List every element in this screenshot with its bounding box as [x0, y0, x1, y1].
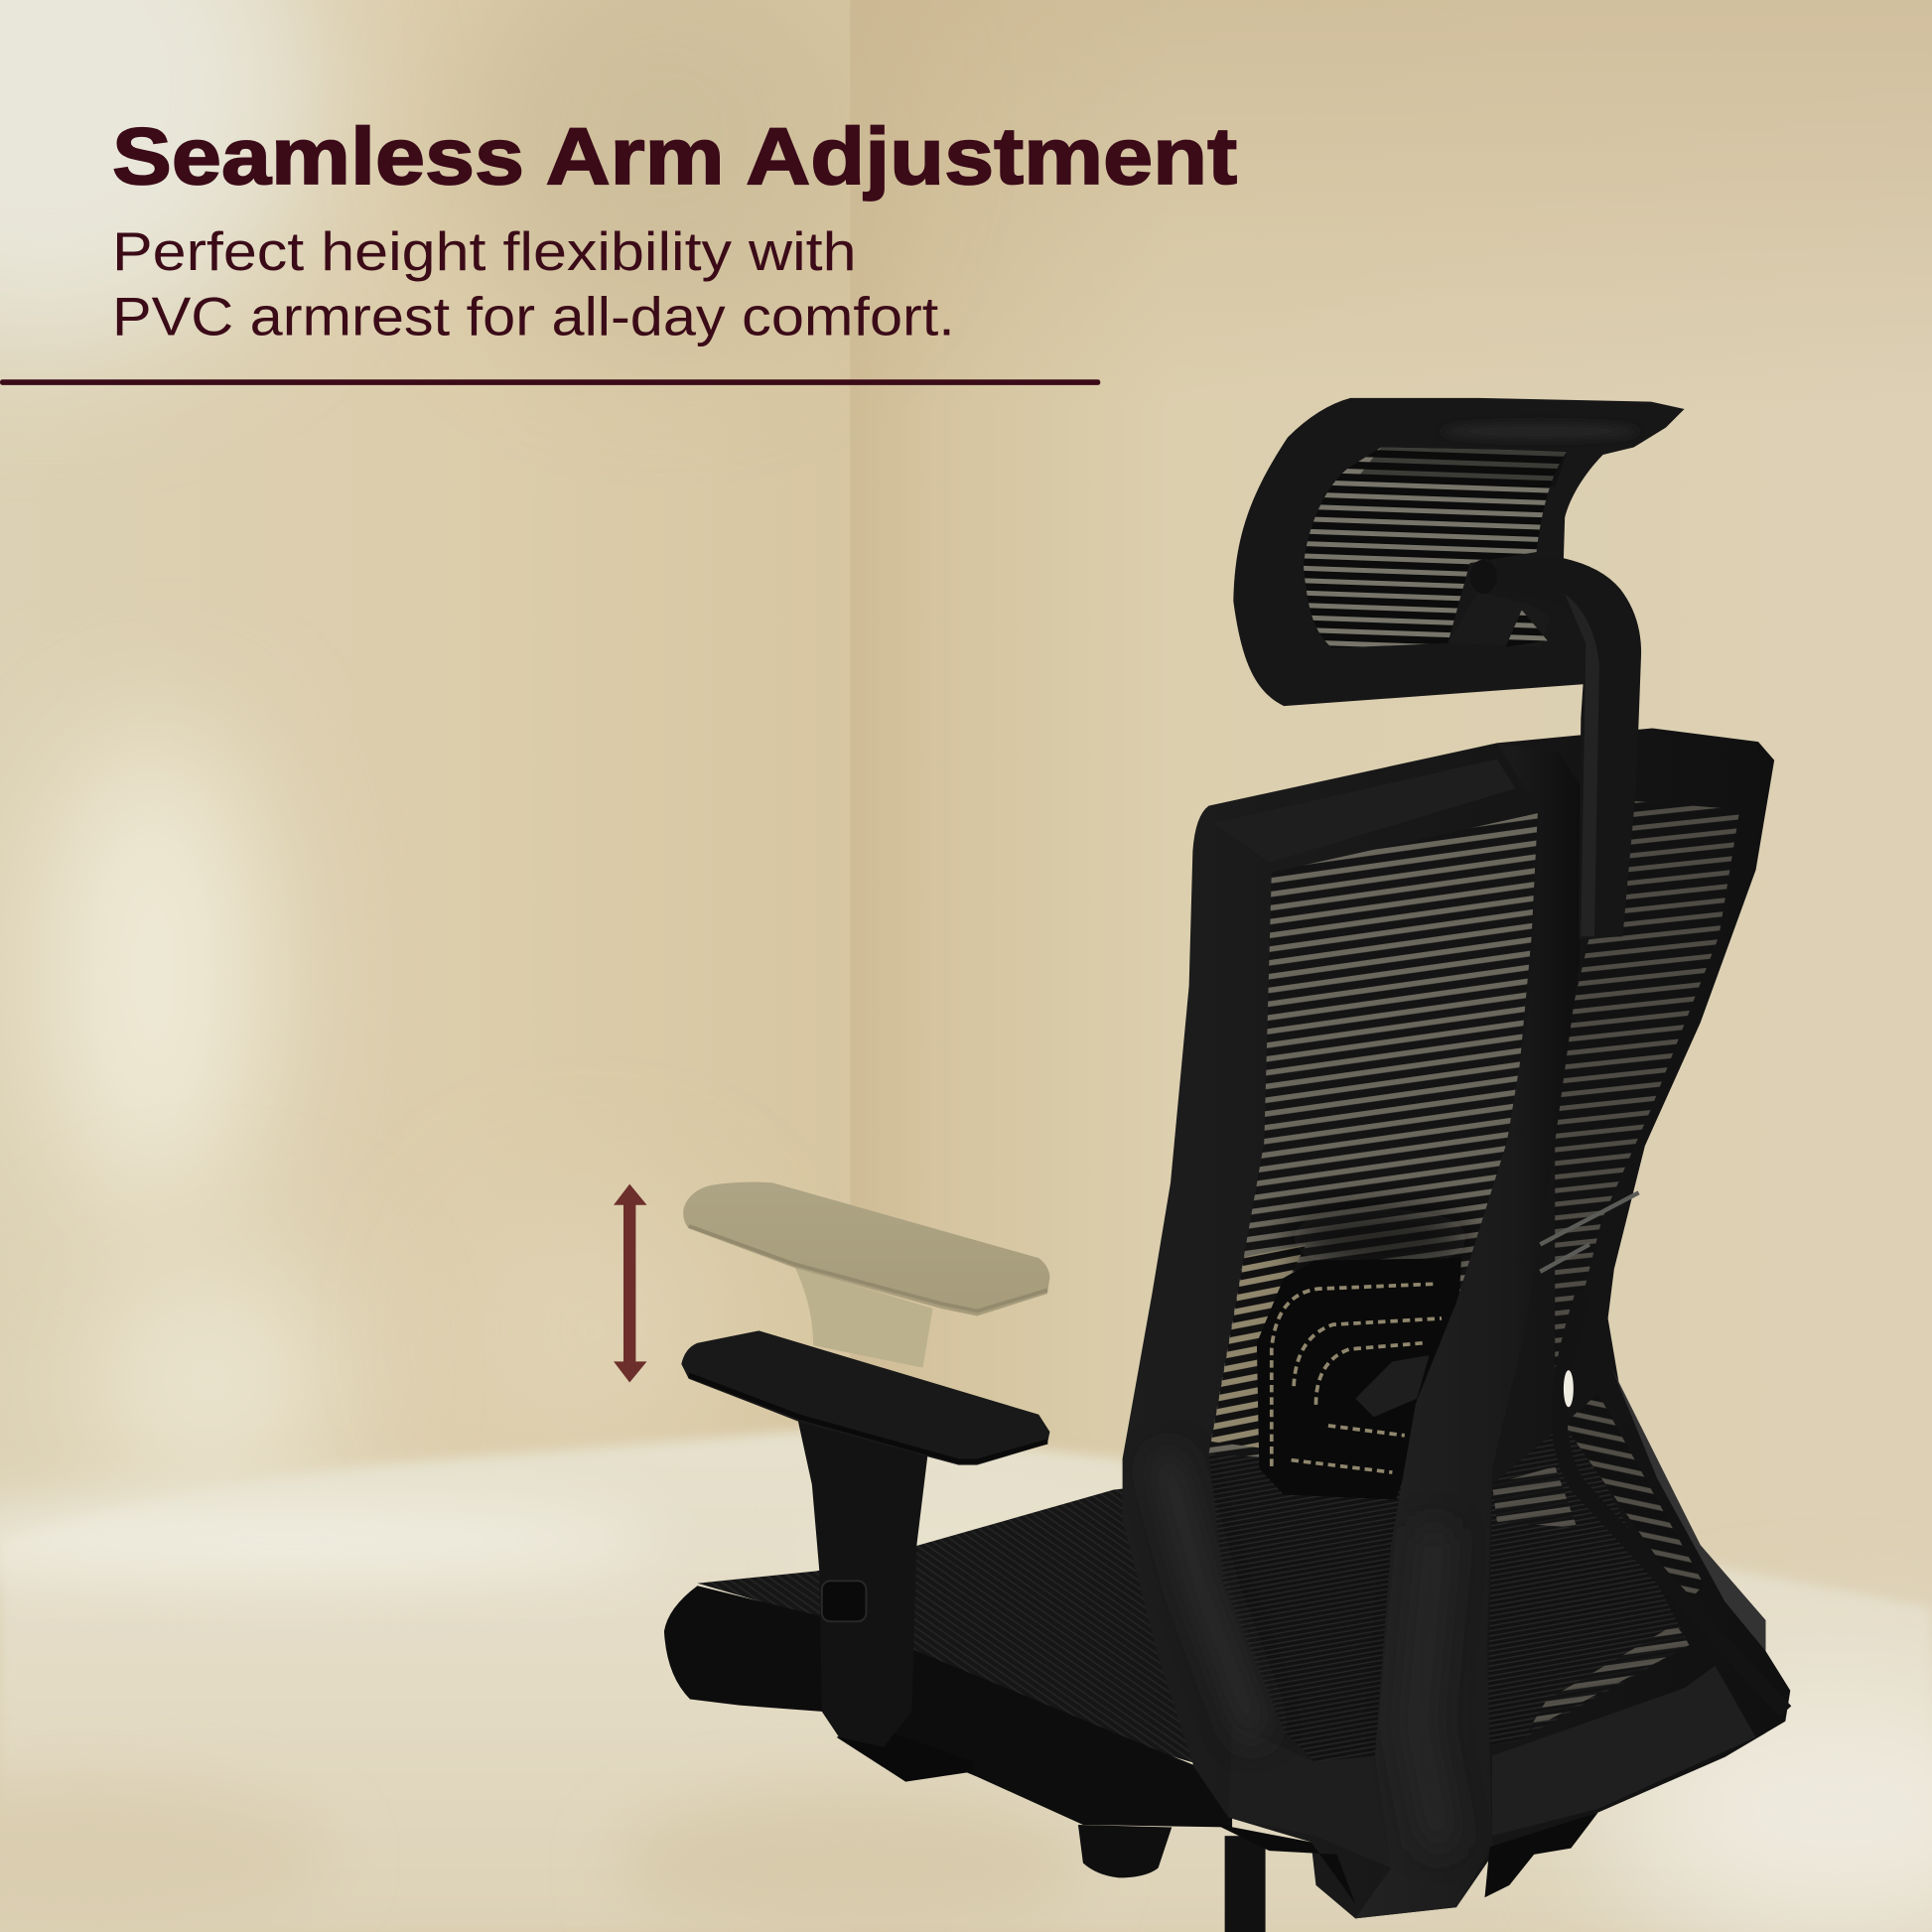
arm post: [797, 1417, 928, 1747]
seat underside bracket: [837, 1725, 973, 1782]
backrest main mesh: lower: [1208, 1453, 1409, 1762]
white gap: [1564, 1370, 1574, 1407]
lower centre mesh tan stripes: [1492, 1466, 1690, 1731]
lumbar support: [1257, 1258, 1461, 1499]
subtitle text: [112, 221, 955, 347]
frame highlights: [1165, 1453, 1442, 1849]
lower rear crossbar: [1492, 1666, 1756, 1836]
armrest: lowered position: [681, 1330, 1049, 1747]
slats between rail and wing: [1540, 1192, 1639, 1272]
tilt knob: [1078, 1825, 1172, 1877]
backrest silhouette: [1123, 728, 1790, 1918]
icon: up-down arrow: [614, 1184, 647, 1382]
subtitle text: Perfect height flexibility with: [112, 221, 857, 282]
wing side surface: [1611, 1368, 1765, 1651]
shadow above lumbar: [1288, 1208, 1472, 1268]
central rail: [1355, 743, 1583, 1918]
backrest top band highlights: [1213, 759, 1516, 863]
heading divider: [0, 379, 1100, 385]
backrest right mesh panel: [1555, 801, 1739, 1368]
arm pad: [681, 1330, 1049, 1465]
seat top fabric: [697, 1478, 1232, 1774]
lower front crossbar: [1228, 1725, 1391, 1867]
lower centre mesh: [1487, 1425, 1690, 1746]
headrest: [1233, 398, 1685, 706]
chair: [664, 398, 1790, 1932]
seat cushion front: [664, 1586, 1232, 1828]
wing mesh strip: [1564, 1394, 1704, 1601]
ghost armrest: raised position: [683, 1182, 1049, 1368]
gas lift post: [1225, 1836, 1266, 1932]
headrest support stem: [1470, 558, 1641, 939]
backrest main mesh: upper: [1208, 813, 1538, 1466]
base mechanism: [1213, 1813, 1598, 1903]
tan highlights in mesh near lumbar: [1211, 1244, 1307, 1448]
seat: [664, 1478, 1266, 1932]
arm lock button: [822, 1581, 866, 1621]
subtitle text: PVC armrest for all-day comfort.: [112, 287, 955, 347]
headrest mesh: [1304, 448, 1568, 648]
inner rib: [1560, 1294, 1785, 1712]
title: Seamless Arm Adjustment: [112, 112, 1237, 202]
